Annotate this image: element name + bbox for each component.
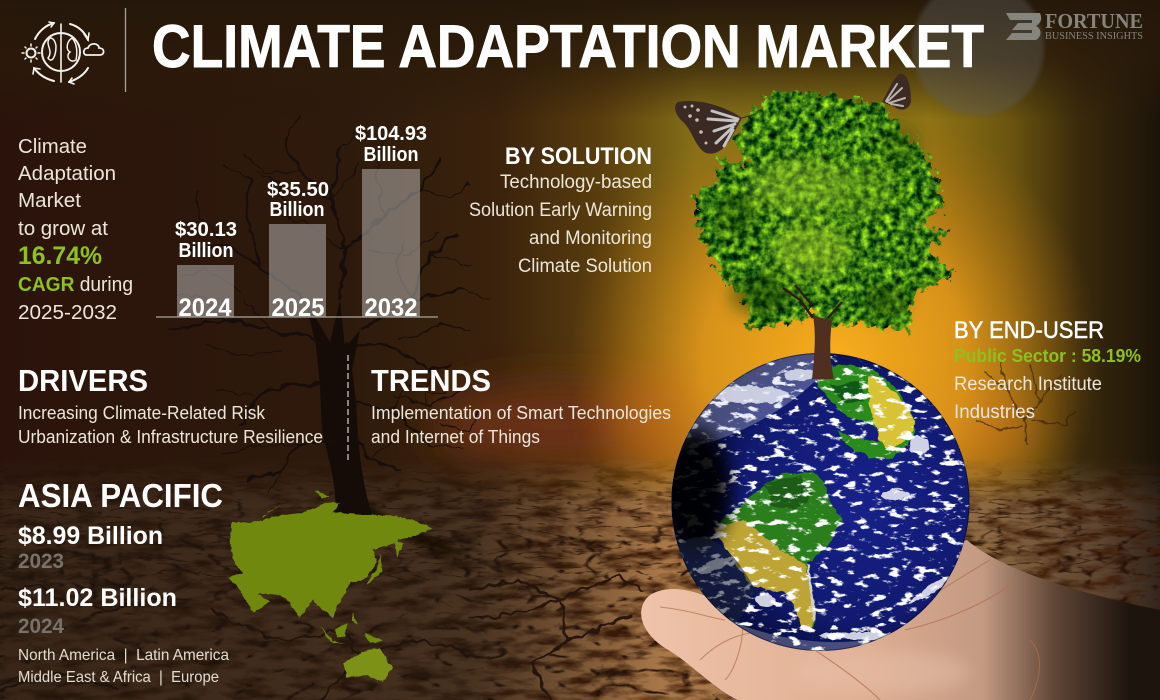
background: cracked earth bbox=[0, 460, 1160, 700]
text block: CAGR statement: CAGR during bbox=[18, 274, 133, 296]
earth globe bbox=[659, 352, 975, 660]
bar 2024: Billion bbox=[178, 240, 234, 262]
text block: trends bbox=[371, 363, 671, 447]
text block: by solution: and Monitoring bbox=[529, 228, 652, 249]
text block: CAGR statement bbox=[18, 136, 133, 324]
text block: by solution bbox=[469, 143, 652, 277]
text block: CAGR statement: 2025-2032 bbox=[18, 302, 117, 324]
tree trunk bbox=[812, 316, 834, 379]
bar 2025 bbox=[267, 179, 329, 322]
brand logo: Fortune Business Insights bbox=[1006, 9, 1143, 42]
text block: Asia Pacific region values: $11.02 Billion bbox=[18, 584, 177, 612]
text block: drivers: Increasing Climate-Related Risk bbox=[18, 403, 266, 423]
text block: Asia Pacific region values: $8.99 Billion bbox=[18, 522, 163, 550]
text block: by solution: BY SOLUTION bbox=[505, 143, 652, 170]
text block: trends: and Internet of Things bbox=[371, 427, 540, 447]
text block: Asia Pacific region values bbox=[18, 477, 229, 686]
brand logo: Fortune Business Insights: BUSINESS INSIGHTS bbox=[1045, 31, 1143, 42]
bar 2025: Billion bbox=[270, 199, 324, 221]
bar 2032: 2032 bbox=[364, 294, 418, 322]
cloud layer bbox=[670, 352, 972, 652]
text block: CAGR statement: 16.74% bbox=[18, 242, 102, 270]
text block: drivers bbox=[18, 363, 323, 447]
hand holding globe bbox=[641, 540, 1160, 700]
text block: drivers: Urbanization & Infrastructure Resilience bbox=[18, 427, 323, 447]
logo icon bbox=[22, 22, 104, 84]
text block: by solution: Technology-based bbox=[500, 172, 652, 193]
bar chart: market size bbox=[156, 123, 438, 322]
logo divider bbox=[124, 8, 126, 92]
text block: trends: TRENDS bbox=[371, 363, 491, 398]
text block: CAGR statement: Market bbox=[18, 190, 81, 212]
text block: Asia Pacific region values: 2023 bbox=[18, 550, 64, 573]
text block: by end-user: BY END-USER bbox=[954, 317, 1104, 344]
title: CLIMATE ADAPTATION MARKET bbox=[152, 13, 984, 80]
text block: CAGR statement: Climate bbox=[18, 136, 87, 158]
text block: CAGR statement: to grow at bbox=[18, 218, 108, 240]
bar 2025: $35.50 bbox=[267, 179, 329, 201]
bar 2024 bbox=[175, 219, 237, 322]
brand logo: Fortune Business Insights: FORTUNE bbox=[1045, 9, 1143, 33]
text block: Asia Pacific region values: ASIA PACIFIC bbox=[18, 477, 223, 514]
text block: by end-user: Public Sector : 58.19% bbox=[954, 346, 1141, 366]
text block: Asia Pacific region values: North America | Latin America bbox=[18, 647, 229, 664]
text block: by solution: Solution Early Warning bbox=[469, 200, 652, 221]
continent: north america bbox=[818, 365, 916, 460]
continent: south america bbox=[713, 472, 842, 633]
text block: by end-user bbox=[954, 317, 1141, 423]
text block: CAGR statement: Adaptation bbox=[18, 163, 116, 185]
dead tree silhouette bbox=[170, 115, 490, 556]
text block: Asia Pacific region values: Middle East & Africa | Europe bbox=[18, 669, 219, 686]
text block: drivers: DRIVERS bbox=[18, 363, 148, 398]
tree: crown foliage bbox=[693, 90, 957, 333]
bar 2025: 2025 bbox=[272, 294, 325, 322]
text block: trends: Implementation of Smart Technologies bbox=[371, 403, 671, 423]
text block: by end-user: Industries bbox=[954, 402, 1035, 423]
bar 2024: 2024 bbox=[178, 294, 232, 322]
bar 2032 bbox=[355, 123, 427, 322]
icon: left butterfly bbox=[675, 101, 756, 154]
map: Asia Pacific bbox=[228, 490, 433, 682]
icon: right butterfly bbox=[882, 74, 911, 110]
text block: Asia Pacific region values: 2024 bbox=[18, 615, 64, 638]
bar 2024: $30.13 bbox=[175, 219, 237, 241]
bar 2032: Billion bbox=[364, 144, 418, 166]
background: distant dead tree bbox=[975, 360, 1075, 445]
text block: by end-user: Research Institute bbox=[954, 374, 1102, 395]
text block: by solution: Climate Solution bbox=[518, 256, 652, 277]
bar 2032: $104.93 bbox=[355, 123, 427, 145]
